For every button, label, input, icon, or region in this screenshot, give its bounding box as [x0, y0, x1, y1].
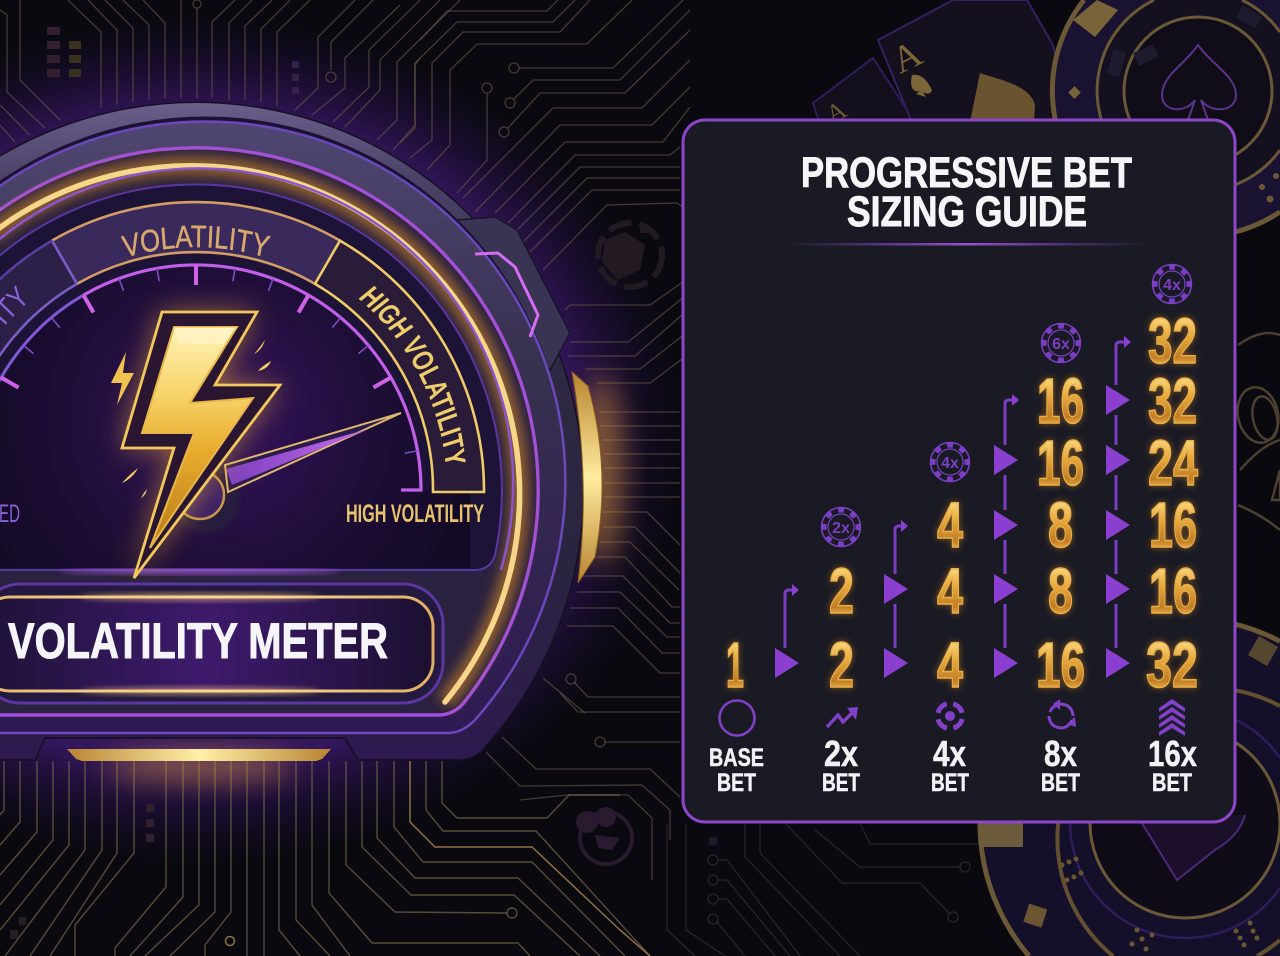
column: 16x bet: 24: [1148, 427, 1198, 499]
label: 8x bet: BET: [1041, 769, 1080, 797]
label: high volatility arc: HIGH VOLATILITY: [358, 286, 466, 462]
column: 8x bet: 8: [1048, 555, 1073, 627]
band: high section: [328, 262, 459, 492]
column: 16x bet: 16: [1149, 489, 1197, 561]
gold arc: [0, 166, 520, 702]
background circuit traces: [0, 0, 980, 956]
icon: base circle: [720, 700, 754, 736]
label: med fragment: ED: [0, 500, 20, 528]
label: base bet: [709, 744, 764, 797]
label: 16x bet: [1148, 733, 1197, 797]
column: 2x bet: [829, 555, 854, 701]
panel: progressive bet sizing guide: [683, 120, 1235, 822]
label: base bet: BET: [717, 769, 756, 797]
upper right bracket: [457, 217, 570, 370]
gold bar: bottom: [67, 749, 331, 761]
chip: 6x: [1042, 324, 1080, 362]
panel heading: PROGRESSIVE BET: [801, 149, 1132, 197]
label: 16x bet: BET: [1152, 769, 1192, 797]
chip: 2x: [822, 508, 860, 546]
icon: refresh arrows: [1049, 699, 1076, 728]
mid band: [0, 121, 565, 733]
icon: sparks: [122, 340, 271, 498]
arrows: step 3: [994, 394, 1019, 678]
label: 2x bet: 2x: [824, 733, 858, 774]
chip: top 4x: 4x: [1163, 277, 1181, 294]
scale band segments: [0, 202, 484, 492]
column: 2x bet: 2: [829, 555, 854, 627]
bracket pink accent: [475, 253, 538, 337]
needle and hub: [170, 413, 401, 533]
icon: target ring: [938, 704, 962, 728]
tan band outlines: [0, 202, 484, 492]
chip: 4x: 4x: [941, 455, 959, 472]
purple halo behind the gauge: [0, 0, 760, 956]
gauge housing: [0, 102, 584, 760]
scale ticks and arc: [0, 265, 421, 490]
playing cards background: A: [886, 32, 929, 82]
label: base bet: BASE: [709, 744, 764, 772]
column: 16x bet: [1146, 305, 1198, 701]
dial face: [0, 184, 502, 570]
chip: 6x: 6x: [1052, 336, 1070, 353]
column: 2x bet: 2: [829, 629, 854, 701]
icon: lightning bolt: [111, 312, 280, 578]
outer shell: [0, 102, 584, 760]
icon: faint emblem upper: [598, 223, 662, 287]
label: volatility arc: VOLATILITY: [120, 225, 271, 256]
dial inner glow: [0, 265, 470, 568]
panel heading: SIZING GUIDE: [847, 188, 1087, 236]
panel heading: [801, 149, 1132, 236]
glow around side gold bar: [582, 375, 622, 565]
icon: faint emblem lower: [576, 807, 632, 864]
band: mid section: [64, 227, 328, 262]
pink ring line: [0, 148, 538, 715]
column: 16x bet: 32: [1146, 629, 1198, 701]
column: 16x bet: 32: [1148, 305, 1197, 377]
band: low section: [0, 262, 65, 490]
poker chip upper right: [1052, 0, 1280, 237]
column: 4x bet: 4: [937, 629, 963, 701]
label: 4x bet: 4x: [933, 733, 966, 774]
glow beneath bottom gold bar: [105, 752, 295, 780]
circuit node at the bottom: [226, 936, 234, 946]
title plate: [0, 584, 443, 703]
icon: small bolt: [111, 352, 134, 405]
icon: trend up: [827, 707, 858, 727]
column: 4x bet: [937, 489, 963, 701]
column: 8x bet: 16: [1037, 427, 1084, 499]
label: 4x bet: [931, 733, 969, 797]
inner purple ring: [0, 168, 513, 570]
poker chip lower right: [980, 618, 1280, 956]
arrows: step 2: [884, 520, 908, 678]
label: 4x bet: BET: [931, 769, 969, 797]
playing cards background: [813, 0, 1070, 129]
column: base bet: 1: [726, 629, 744, 701]
label: 2x bet: BET: [822, 769, 860, 797]
column: 4x bet: 4: [937, 555, 963, 627]
heading divider: [785, 243, 1147, 246]
label: 16x bet: 16x: [1148, 733, 1197, 774]
label: 8x bet: [1041, 733, 1080, 797]
icon: stacked chevrons: [1159, 699, 1185, 736]
gold arc glow: [0, 166, 520, 702]
title: VOLATILITY METER: [8, 613, 388, 669]
arrows: step 4: [1106, 336, 1131, 678]
faint swirl ornament right edge: [1233, 333, 1280, 530]
column: 8x bet: 16: [1036, 629, 1085, 701]
chip: 4x: [930, 442, 970, 482]
arrows: step 1: [775, 584, 799, 678]
column: 8x bet: [1036, 365, 1085, 701]
playing cards background: A: [821, 95, 852, 129]
column: 8x bet: 16: [1037, 365, 1084, 437]
band lower purple glow: [60, 568, 340, 574]
column: 16x bet: 32: [1148, 365, 1197, 437]
column: 16x bet: 16: [1149, 555, 1197, 627]
chip: top 4x: [1152, 264, 1192, 304]
chip: 2x: 2x: [832, 520, 850, 537]
column values: [726, 305, 1198, 701]
label: 2x bet: [822, 733, 860, 797]
label: 8x bet: 8x: [1044, 733, 1077, 774]
gold bar: right side: [572, 372, 602, 583]
column: 4x bet: 4: [937, 489, 963, 561]
label: high volatility: HIGH VOLATILITY: [346, 500, 484, 528]
column: 8x bet: 8: [1048, 489, 1073, 561]
inner shell recess: [0, 116, 565, 728]
